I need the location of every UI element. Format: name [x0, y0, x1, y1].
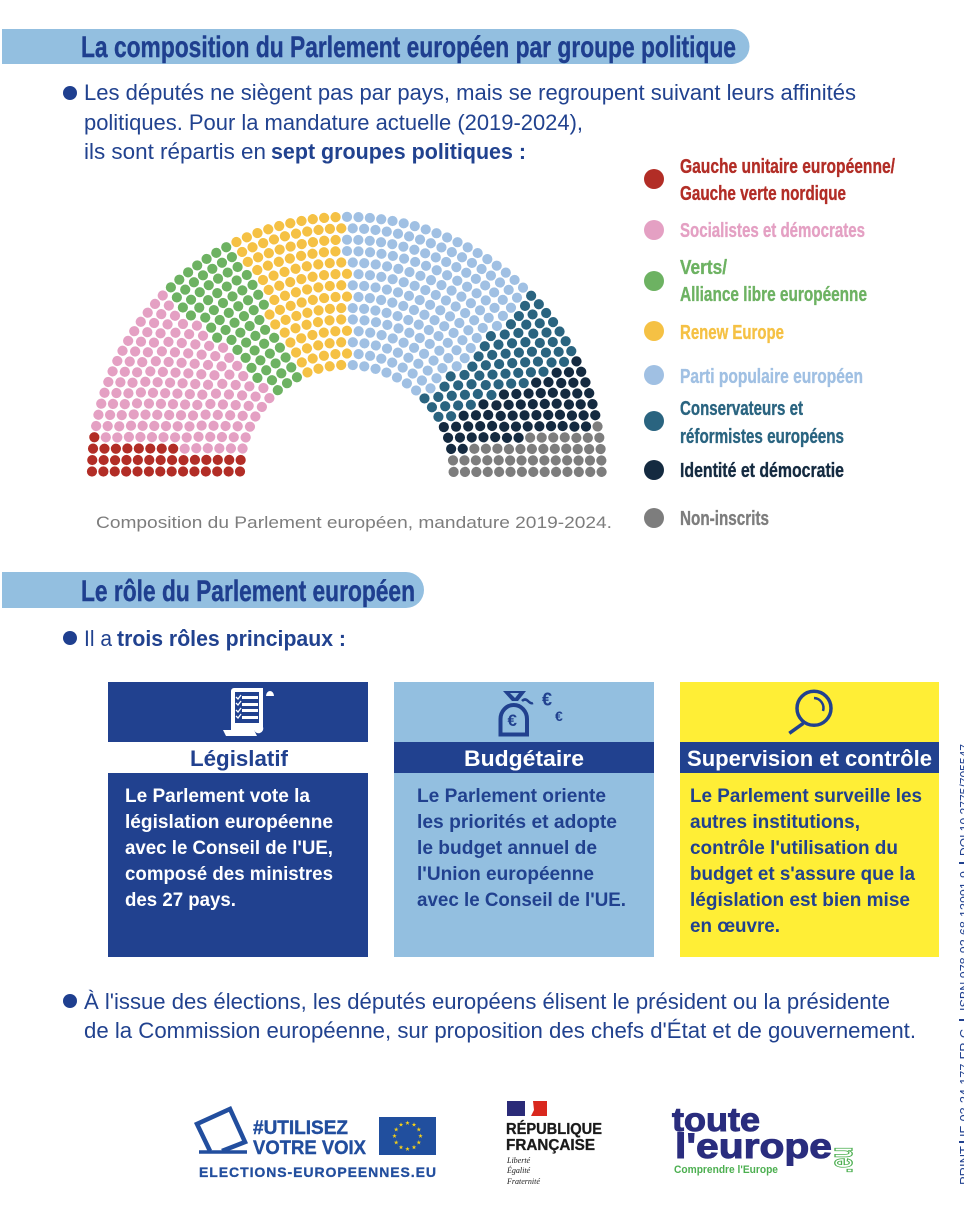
seats: Identité et démocratie — [117, 361, 687, 812]
card text — [690, 785, 922, 937]
logo: utilisez votre voix — [197, 1109, 436, 1180]
closing text: de la Commission européenne, sur proposition des chefs d'État et de gouvernement. — [84, 1018, 916, 1043]
icon: scroll checklist — [223, 688, 274, 736]
icon: money bag — [500, 690, 563, 734]
intro text: ils sont répartis en — [84, 139, 266, 164]
logo: République française: Fraternité — [506, 1177, 540, 1186]
card text — [125, 785, 333, 911]
legend item: Parti populaire: Parti populaire européen — [680, 366, 863, 388]
card text: composé des ministres — [125, 863, 333, 885]
roles intro: trois rôles principaux : — [117, 626, 346, 651]
card text: législation est bien mise — [690, 889, 910, 911]
icon: money bag: € — [542, 690, 552, 710]
icon: EU flag — [379, 1117, 436, 1155]
card title: Législatif — [190, 746, 289, 771]
legend item: Renew Europe — [644, 321, 784, 344]
icon: ballot — [197, 1109, 247, 1152]
legend item: Conservateurs: Conservateurs et — [680, 398, 803, 420]
logo: République française: RÉPUBLIQUE — [506, 1121, 602, 1138]
logo: toute l'europe — [672, 1101, 859, 1176]
card text: avec le Conseil de l'UE. — [417, 889, 626, 911]
intro text: sept groupes politiques : — [271, 139, 526, 164]
card text: Le Parlement surveille les — [690, 785, 922, 807]
legend item: Verts: Verts/ — [680, 257, 727, 279]
card text: autres institutions, — [690, 811, 860, 833]
card text: le budget annuel de — [417, 837, 597, 859]
seats: Conservateurs et réformistes — [163, 296, 707, 832]
seats: Renew Europe — [236, 132, 687, 701]
icon: money bag: € — [555, 708, 563, 724]
logo: toute l'europe: toute — [672, 1101, 760, 1138]
heading: composition: La composition du Parlement européen par groupe politique — [81, 31, 736, 64]
card text: avec le Conseil de l'UE, — [125, 837, 333, 859]
legend item: Conservateurs: réformistes européens — [680, 426, 844, 448]
card title: Supervision et contrôle — [687, 746, 932, 771]
seats: Non-inscrits — [96, 426, 643, 768]
card title: Budgétaire — [464, 746, 584, 771]
logo: toute l'europe: Comprendre l'Europe — [674, 1164, 778, 1176]
legend item: Gauche unitaire — [644, 156, 895, 205]
card text: les priorités et adopte — [417, 811, 617, 833]
seats: Socialistes et démocrates — [96, 175, 643, 517]
heading: composition — [2, 29, 750, 64]
card text — [417, 785, 626, 911]
logo: République française: Liberté — [506, 1156, 531, 1165]
closing text: À l'issue des élections, les députés européens élisent le président ou la présidente — [84, 989, 890, 1014]
seats: Gauche unitaire européenne — [92, 217, 602, 472]
card text: en œuvre. — [690, 915, 780, 937]
chart caption: Composition du Parlement européen, mandature 2019-2024. — [96, 513, 612, 532]
icon: magnifying glass — [789, 691, 831, 733]
icon: money bag: € — [508, 711, 518, 730]
intro text — [63, 80, 856, 164]
side print reference — [957, 744, 964, 1185]
logo: République française: FRANÇAISE — [506, 1137, 595, 1154]
card text: législation européenne — [125, 811, 333, 833]
logo: utilisez votre voix: ELECTIONS-EUROPEENNES.EU — [199, 1164, 436, 1180]
panel: Législatif — [108, 682, 368, 957]
legend — [644, 156, 895, 530]
card text: Le Parlement oriente — [417, 785, 606, 807]
card text: Le Parlement vote la — [125, 785, 310, 807]
logo: utilisez votre voix: VOTRE VOIX — [253, 1137, 366, 1159]
legend item: Conservateurs — [644, 398, 844, 448]
legend item: Verts — [644, 257, 867, 306]
logo: utilisez votre voix: #UTILISEZ — [253, 1117, 348, 1139]
intro text: politiques. Pour la mandature actuelle (2019-2024), — [84, 110, 583, 135]
heading: role — [2, 572, 424, 608]
seats: Parti populaire européen — [335, 217, 602, 727]
heading: role: Le rôle du Parlement européen — [81, 575, 415, 608]
seats: Verts — [171, 111, 707, 656]
legend item: Non-inscrits — [644, 508, 769, 530]
legend item: Identité — [644, 460, 844, 482]
logo: toute l'europe: l'europe — [675, 1127, 832, 1166]
roles intro: Il a — [84, 626, 113, 651]
card text: l'Union européenne — [417, 863, 594, 885]
legend item: Gauche unitaire: Gauche verte nordique — [680, 183, 846, 205]
legend item: Non-inscrits: Non-inscrits — [680, 508, 769, 530]
logo: République française — [506, 1101, 602, 1186]
legend item: Socialistes: Socialistes et démocrates — [680, 220, 865, 242]
intro text: Les députés ne siègent pas par pays, mais se regroupent suivant leurs affinités — [84, 80, 856, 105]
card text: des 27 pays. — [125, 889, 236, 911]
legend item: Renew Europe: Renew Europe — [680, 322, 784, 344]
legend item: Parti populaire — [644, 365, 863, 388]
panel: Supervision et contrôle — [680, 682, 939, 957]
legend item: Identité: Identité et démocratie — [680, 460, 844, 482]
card text: budget et s'assure que la — [690, 863, 915, 885]
legend item: Socialistes — [644, 220, 865, 242]
hemicycle chart — [92, 111, 707, 832]
logo: toute l'europe: .eu — [823, 1147, 859, 1173]
legend item: Gauche unitaire: Gauche unitaire européenne/ — [680, 156, 895, 178]
legend item: Verts: Alliance libre européenne — [680, 284, 867, 306]
panel: Budgétaire — [394, 682, 654, 957]
card text: contrôle l'utilisation du — [690, 837, 898, 859]
closing text — [63, 989, 916, 1043]
logo: République française: Égalité — [506, 1165, 531, 1175]
